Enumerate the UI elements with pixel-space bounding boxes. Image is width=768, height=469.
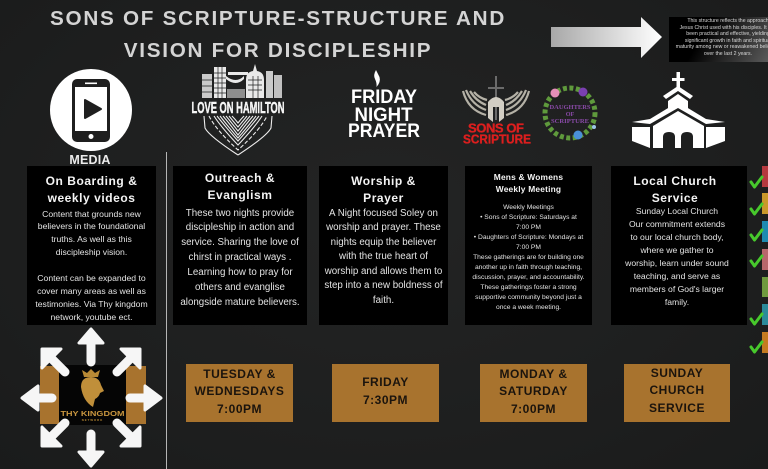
text: on boarding: Content that grounds new xyxy=(42,208,141,218)
heading: worship xyxy=(351,174,416,204)
colour squares and checkmarks xyxy=(749,166,768,354)
text: local church xyxy=(625,206,729,306)
heading: on boarding: On Boarding & xyxy=(46,174,137,188)
logo: love on hamilton xyxy=(192,64,284,156)
logo: friday night prayer xyxy=(348,70,420,140)
panel: worship xyxy=(319,166,448,325)
logo: daughters of scripture: DAUGHTERS xyxy=(550,104,591,111)
graphic: thy kingdom network: THY KINGDOM xyxy=(60,409,124,418)
gold backing xyxy=(40,366,146,424)
logo: daughters of scripture: OF xyxy=(566,111,575,118)
text: local church: to our local church body, xyxy=(630,232,724,242)
divider line xyxy=(166,152,167,469)
text: mens and womens: 7:00 PM xyxy=(516,244,541,251)
text: local church: members of God's larger xyxy=(630,284,724,294)
schedule: sunday: CHURCH xyxy=(650,383,704,397)
text: on boarding: testimonies. Via Thy kingdom xyxy=(35,299,148,309)
schedule: sunday: SUNDAY xyxy=(651,366,703,380)
text: worship xyxy=(324,208,443,306)
text: outreach: others and evanglise xyxy=(195,282,285,293)
text: outreach: Learning how to pray for xyxy=(187,267,293,278)
heading: on boarding: weekly videos xyxy=(48,190,135,204)
schedule: tuesday and wednesdays: TUESDAY & xyxy=(203,366,276,380)
black logo card xyxy=(59,365,126,425)
text: local church: where we gather to xyxy=(640,244,714,254)
text: local church: Our commitment extends xyxy=(629,218,725,228)
text: local church: family. xyxy=(665,296,689,306)
text: outreach xyxy=(180,208,300,308)
icon: media phone xyxy=(50,69,132,151)
text: mens and womens: discussion, prayer, and accountability. xyxy=(472,274,585,281)
callout: vision note xyxy=(669,17,768,62)
logo: friday night prayer: FRIDAY xyxy=(351,86,417,108)
text: outreach: discipleship in action and xyxy=(186,222,294,233)
heading: local church: Service xyxy=(652,190,698,204)
heading: mens and womens: Mens & Womens xyxy=(494,172,563,182)
text: worship: worship and prayer. These xyxy=(326,222,441,233)
logo: friday night prayer: NIGHT xyxy=(354,104,413,126)
heading: local church xyxy=(633,174,717,204)
schedule: tuesday and wednesdays: WEDNESDAYS xyxy=(195,384,284,398)
panel: outreach xyxy=(173,166,307,325)
lion xyxy=(81,377,104,407)
text: worship: nights equip the believer xyxy=(331,237,436,248)
icon: church xyxy=(632,72,725,148)
panel: local church xyxy=(611,166,747,325)
heading: worship: Prayer xyxy=(363,190,404,204)
heading: mens and womens: Weekly Meeting xyxy=(496,184,561,194)
schedule: monday and saturday: MONDAY & xyxy=(499,366,568,380)
heading: local church: Local Church xyxy=(633,174,717,188)
text: on boarding xyxy=(35,208,148,322)
text: on boarding: Content can be expanded to xyxy=(37,273,146,283)
text: mens and womens: another up in faith through teaching, xyxy=(475,264,582,271)
callout: vision note: been practical and effective, yielding xyxy=(686,31,768,37)
schedule: sunday xyxy=(624,364,730,422)
text: mens and womens: once a week meeting. xyxy=(496,304,561,311)
logo: sons of scripture xyxy=(462,76,531,146)
heading: outreach: Outreach & xyxy=(205,171,275,185)
text: mens and womens: Weekly Meetings xyxy=(503,204,554,211)
heading: worship: Worship & xyxy=(351,174,416,188)
text: on boarding: believers in the foundational xyxy=(38,221,145,231)
text: outreach: chirst in practical ways . xyxy=(189,252,291,263)
title xyxy=(50,7,506,62)
text: mens and womens: These gatherings are for building one xyxy=(473,254,584,261)
text: on boarding: discipleship vision. xyxy=(56,247,127,257)
text: local church: worship, learn under sound xyxy=(625,258,729,268)
heading: outreach: Evanglism xyxy=(208,188,272,202)
schedule: monday and saturday: SATURDAY xyxy=(499,384,568,398)
media label: MEDIA xyxy=(69,153,111,167)
schedule: friday: FRIDAY xyxy=(362,375,409,389)
arrow: to vision note xyxy=(551,17,662,58)
callout: vision note: This structure reflects the approach xyxy=(687,18,768,24)
heading: outreach xyxy=(205,171,275,202)
logo: daughters of scripture xyxy=(542,86,598,140)
schedule: tuesday and wednesdays xyxy=(186,364,293,422)
graphic: thy kingdom network xyxy=(20,327,163,468)
text: mens and womens xyxy=(472,204,585,311)
text: mens and womens: supportive community beyond just a xyxy=(475,294,582,301)
text: on boarding: network, youtube ect. xyxy=(50,312,132,322)
schedule: friday xyxy=(332,364,439,422)
schedule: monday and saturday xyxy=(480,364,587,422)
text: worship: faith. xyxy=(373,295,394,306)
title: VISION FOR DISCIPLESHIP xyxy=(124,39,432,62)
text: local church: Sunday Local Church xyxy=(636,206,718,216)
text: mens and womens: These gatherings foster a strong xyxy=(480,284,577,291)
panel: mens and womens xyxy=(465,166,592,325)
logo: daughters of scripture: SCRIPTURE xyxy=(551,118,589,125)
text: local church: teaching, and serve as xyxy=(634,270,720,280)
schedule: monday and saturday: 7:00PM xyxy=(511,402,556,416)
title: SONS OF SCRIPTURE-STRUCTURE AND xyxy=(50,7,506,30)
text: on boarding: cover many areas as well as xyxy=(37,286,146,296)
text: outreach: alongside mature believers. xyxy=(180,297,300,308)
graphic: thy kingdom network: NETWORK xyxy=(82,418,103,422)
heading: on boarding xyxy=(46,174,137,204)
text: worship: with the true heart of xyxy=(339,251,428,262)
text: mens and womens: • Daughters of Scripture: Mondays at xyxy=(474,234,583,241)
schedule: tuesday and wednesdays: 7:00PM xyxy=(217,402,262,416)
callout: vision note: over the last 2 years. xyxy=(704,51,752,57)
logo: sons of scripture: SONS OF xyxy=(468,120,524,136)
text: mens and womens: • Sons of Scripture: Saturdays at xyxy=(480,214,577,221)
schedule: sunday: SERVICE xyxy=(649,400,705,414)
heading: mens and womens xyxy=(494,172,563,194)
text: outreach: These two nights provide xyxy=(186,208,294,218)
text: worship: worship and allows them to xyxy=(325,266,442,277)
schedule: friday: 7:30PM xyxy=(363,392,408,406)
text: worship: A Night focused Soley on xyxy=(329,208,438,218)
arrows outward xyxy=(22,329,161,466)
panel: on boarding xyxy=(27,166,156,325)
text: worship: step into a new boldness of xyxy=(324,280,443,291)
text: outreach: service. Sharing the love of xyxy=(181,237,299,248)
text: on boarding: truths. As well as this xyxy=(51,234,132,244)
text: mens and womens: 7:00 PM xyxy=(516,224,541,231)
